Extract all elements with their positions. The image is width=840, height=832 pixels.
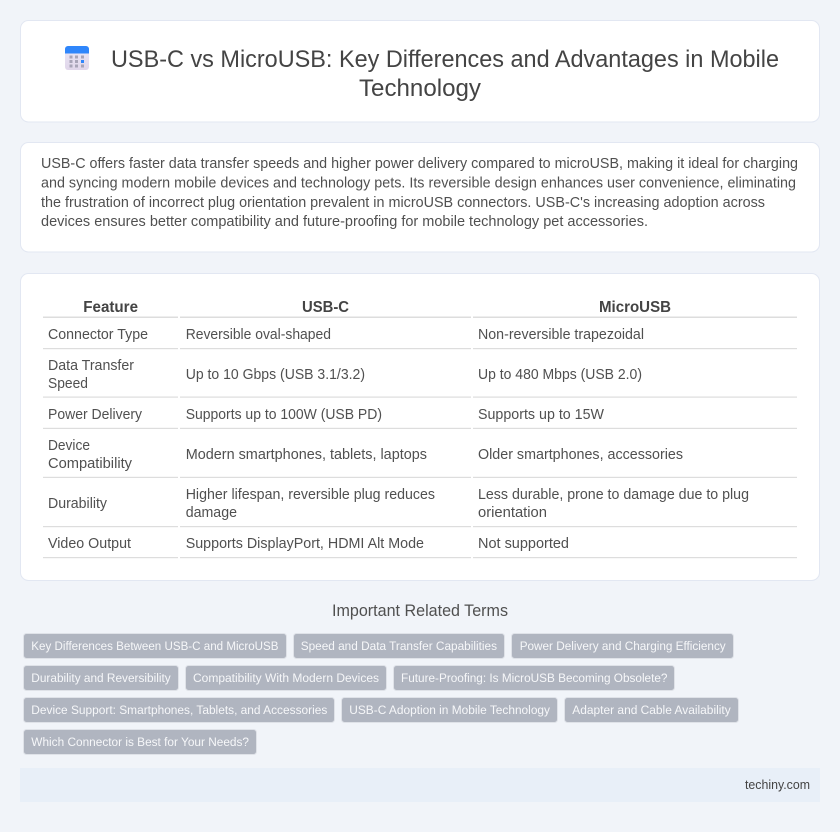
row: durability (48, 487, 749, 521)
tag row 2: Durability and Reversibility (31, 671, 171, 685)
title (111, 46, 779, 102)
heading: important related terms: Important Related Terms (332, 602, 508, 620)
row: connector type: Connector Type (48, 327, 148, 343)
row: video output: Not supported (478, 536, 569, 552)
tag row 3: USB-C Adoption in Mobile Technology (349, 703, 551, 717)
tag row 1 (24, 634, 734, 658)
table header row: Feature (83, 299, 138, 316)
table header row: MicroUSB (599, 299, 671, 316)
icon: calendar (65, 46, 89, 70)
table header row: USB-C (302, 299, 349, 316)
panel: comparison table (20, 274, 820, 580)
footer: techiny.com (745, 777, 810, 792)
tag row 1: Power Delivery and Charging Efficiency (520, 639, 726, 653)
title: Technology (359, 75, 482, 102)
tag row 2: Future-Proofing: Is MicroUSB Becoming Obsolete? (401, 671, 668, 685)
row: durability: Less durable, prone to damage due to plug (478, 487, 749, 503)
row: power delivery: Supports up to 100W (USB PD) (186, 407, 382, 423)
row: connector type (48, 327, 644, 343)
text block: summary: devices ensures better compatibility and future-proofing for mobile technology pet accessories. (41, 214, 648, 230)
tag row 2: Compatibility With Modern Devices (193, 671, 379, 685)
tag row 1: Key Differences Between USB-C and MicroUSB (31, 639, 278, 653)
text block: summary: the frustration of incorrect plug orientation prevalent in microUSB connectors. USB-C's increasing adoption across (41, 195, 765, 211)
row: device compatibility: Device (48, 438, 90, 454)
row: durability: Durability (48, 496, 108, 512)
row: data transfer speed (48, 358, 642, 392)
tag row 3: Adapter and Cable Availability (572, 703, 731, 717)
row: connector type: Reversible oval-shaped (186, 327, 331, 343)
row: durability: orientation (478, 505, 547, 521)
tag row 2 (24, 666, 674, 690)
row: video output (48, 536, 569, 552)
row: device compatibility: Older smartphones, accessories (478, 447, 683, 463)
row: data transfer speed: Speed (48, 376, 88, 392)
row: device compatibility: Modern smartphones, tablets, laptops (186, 447, 427, 463)
panel: header (20, 20, 820, 122)
tag row 3 (24, 698, 738, 722)
tag row 4 (24, 730, 256, 754)
row: data transfer speed: Up to 480 Mbps (USB 2.0) (478, 367, 642, 383)
row: durability: Higher lifespan, reversible plug reduces (186, 487, 435, 503)
footer (20, 768, 820, 802)
panel: description (20, 142, 820, 252)
tags: related terms (24, 634, 738, 754)
title: USB-C vs MicroUSB: Key Differences and Advantages in Mobile (111, 46, 779, 73)
row: power delivery: Power Delivery (48, 407, 143, 423)
tag row 4: Which Connector is Best for Your Needs? (31, 735, 249, 749)
row: video output: Supports DisplayPort, HDMI Alt Mode (186, 536, 424, 552)
row: power delivery (48, 407, 604, 423)
row: power delivery: Supports up to 15W (478, 407, 604, 423)
tag row 1: Speed and Data Transfer Capabilities (301, 639, 497, 653)
text block: summary: USB-C offers faster data transfer speeds and higher power delivery compared to microUSB, making it ideal for charging (41, 156, 798, 172)
row: video output: Video Output (48, 536, 131, 552)
table header row (83, 299, 671, 316)
row: durability: damage (186, 505, 237, 521)
row: data transfer speed: Up to 10 Gbps (USB 3.1/3.2) (186, 367, 365, 383)
row: data transfer speed: Data Transfer (48, 358, 134, 374)
row: device compatibility (48, 438, 683, 472)
text block: summary (41, 156, 798, 230)
tag row 3: Device Support: Smartphones, Tablets, and Accessories (31, 703, 327, 717)
row: device compatibility: Compatibility (48, 456, 133, 472)
text block: summary: and syncing modern mobile devices and technology pets. Its reversible design enhances user convenience, eliminating (41, 176, 796, 192)
row: connector type: Non-reversible trapezoidal (478, 327, 644, 343)
